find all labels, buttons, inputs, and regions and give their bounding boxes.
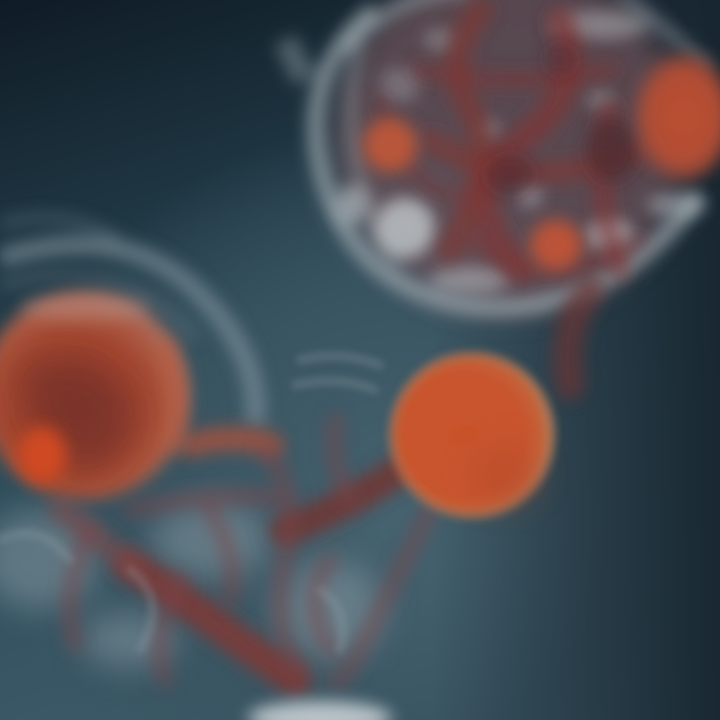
bright orange core: [18, 427, 66, 483]
orange rim right: [162, 340, 178, 450]
orange ball left: [363, 118, 417, 172]
sphere shading: [470, 445, 540, 505]
upper right molecular sphere: [285, 0, 720, 310]
sphere red strands: [380, 10, 640, 270]
sphere glow rim: [392, 355, 552, 515]
left sphere rings: [0, 218, 256, 425]
red chain thin: [70, 420, 430, 681]
sphere inner white lattice patches: [336, 11, 703, 294]
orange ball right: [634, 53, 720, 181]
centre orange sphere: [391, 354, 553, 516]
sphere body haze: [335, 0, 685, 310]
bottom white blob: [248, 701, 392, 720]
left sphere body: [0, 291, 189, 499]
pale highlight on top: [20, 296, 150, 320]
left large sphere: [0, 291, 189, 499]
red chain centre: [285, 470, 400, 530]
dark spots: [486, 44, 638, 195]
sphere outer lattice ring: [285, 0, 710, 308]
red chain main diagonal: [130, 565, 295, 680]
lower left lattice haze: [0, 500, 385, 668]
orange ball bottom: [530, 220, 582, 270]
dark core: [20, 360, 132, 470]
pale lattice: [0, 356, 380, 650]
lattice strands and DNA chain: [0, 356, 430, 681]
red chain upper: [190, 438, 272, 445]
strand below upper sphere: [568, 290, 590, 385]
